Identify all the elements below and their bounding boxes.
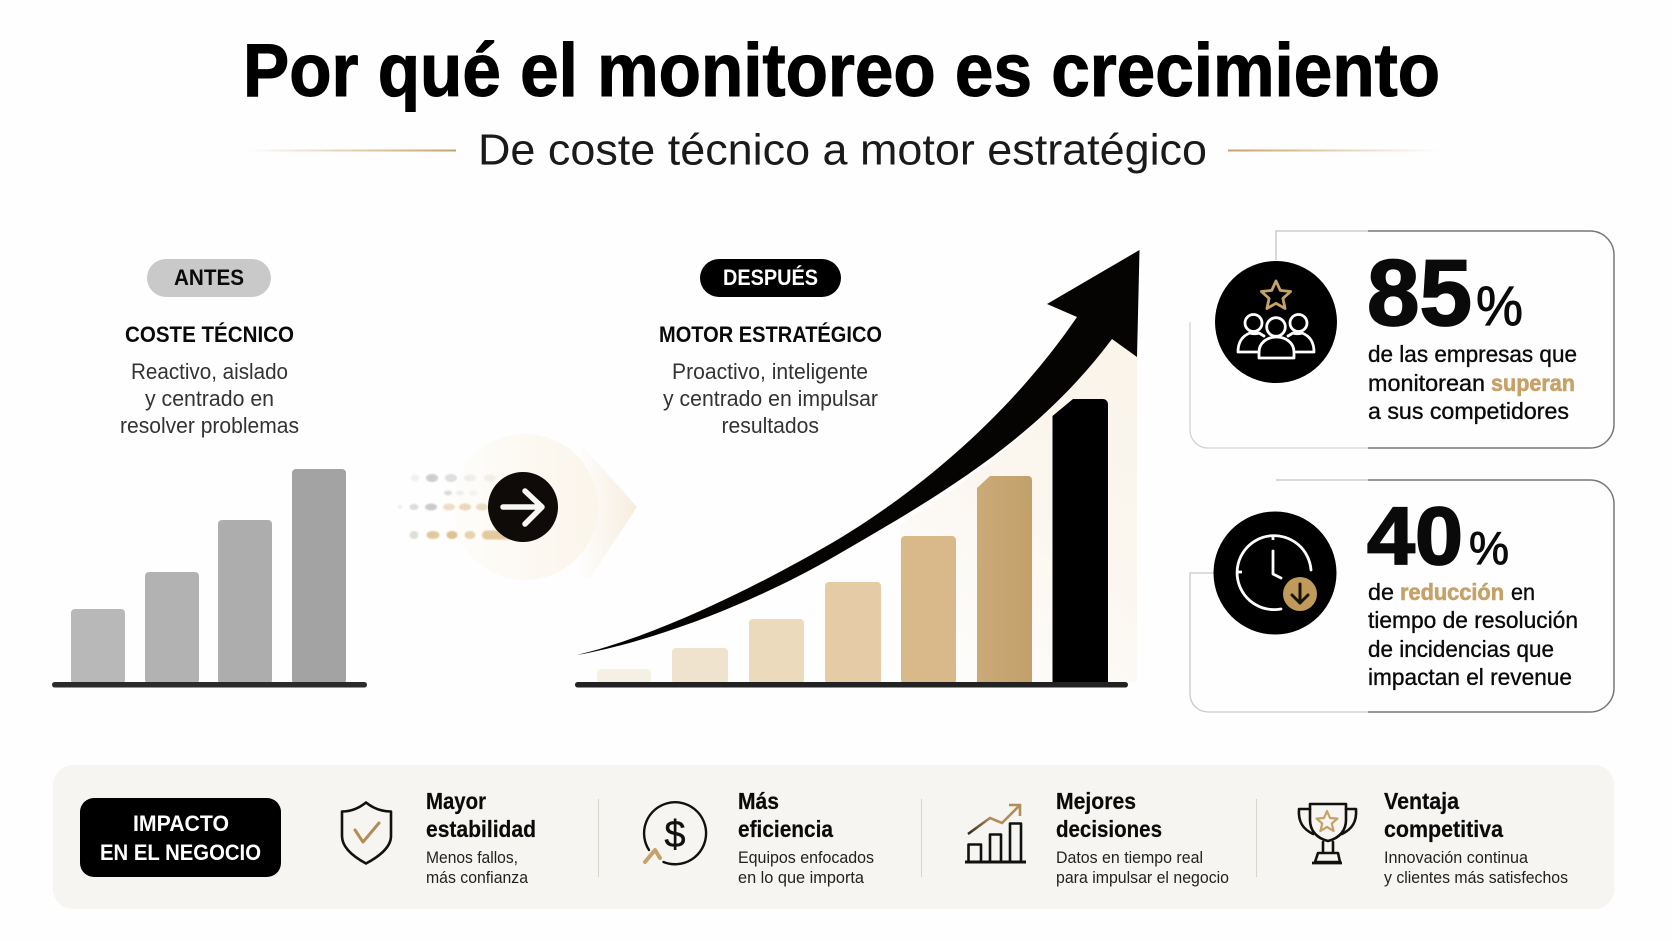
stat: 40% [1367, 491, 1509, 582]
title: Por qué el monitoreo es crecimiento [243, 28, 1440, 112]
item: más eficiencia: en lo que importa [738, 869, 865, 887]
panel: impacto en el negocio [53, 765, 1614, 909]
item: mayor estabilidad: estabilidad [426, 816, 536, 842]
text: 40% description: en [1511, 579, 1535, 605]
item: ventaja competitiva: Ventaja [1384, 788, 1459, 814]
item: mayor estabilidad: Mayor [426, 788, 486, 814]
item: más eficiencia: eficiencia [738, 816, 833, 842]
item: más eficiencia [644, 788, 874, 887]
bar chart: después with growth arrow [575, 250, 1140, 688]
badge: antes: ANTES [174, 265, 244, 290]
icon: rising chart [965, 805, 1026, 862]
stat: 85%: % [1476, 274, 1523, 337]
item: más eficiencia: Equipos enfocados [738, 849, 874, 867]
text: 40% description: reducción [1400, 579, 1504, 605]
item: mejores decisiones [965, 788, 1229, 887]
description: antes: resolver problemas [120, 413, 299, 438]
label: impacto en el negocio: IMPACTO [133, 811, 229, 836]
panel: después [575, 250, 1140, 688]
label: impacto en el negocio: EN EL NEGOCIO [100, 840, 261, 865]
icon: dollar coin: $ [664, 814, 686, 856]
description: después: y centrado en impulsar [663, 386, 878, 411]
text: 85% description [1368, 341, 1577, 424]
heading: motor estratégico: MOTOR ESTRATÉGICO [659, 322, 882, 347]
arrow: transition [398, 434, 637, 580]
item: mejores decisiones: Mejores [1056, 788, 1136, 814]
icon: team with star [1215, 261, 1337, 383]
badge: después: DESPUÉS [723, 265, 818, 290]
heading: coste técnico: COSTE TÉCNICO [125, 322, 294, 347]
item: ventaja competitiva: Innovación continua [1384, 849, 1529, 867]
icon: shield [342, 802, 391, 864]
icon: dollar coin [644, 802, 706, 864]
text: 40% description: tiempo de resolución [1368, 607, 1578, 633]
description: antes [120, 359, 299, 438]
panel: antes [52, 259, 367, 688]
item: mejores decisiones: para impulsar el negocio [1056, 869, 1229, 887]
stat: 85%: 85 [1367, 240, 1472, 345]
item: ventaja competitiva [1299, 788, 1568, 887]
description: después: Proactivo, inteligente [672, 359, 868, 384]
card: 40% [1190, 480, 1614, 712]
icon: clock with down arrow [1214, 512, 1336, 634]
bar chart: antes [52, 469, 367, 688]
badge: antes [147, 259, 271, 297]
item: más eficiencia: Más [738, 788, 779, 814]
subtitle with side rules: De coste técnico a motor estratégico [478, 126, 1207, 174]
stat: 85% [1367, 240, 1523, 345]
description: antes: Reactivo, aislado [131, 359, 288, 384]
icon: trophy [1299, 804, 1356, 863]
text: 85% description: a sus competidores [1368, 398, 1569, 424]
text: 40% description [1368, 579, 1578, 690]
badge: después [700, 259, 841, 297]
item: mejores decisiones: Datos en tiempo real [1056, 849, 1203, 867]
label: impacto en el negocio [80, 798, 281, 877]
text: 85% description: de las empresas que [1368, 341, 1577, 367]
stat: 40%: 40 [1367, 491, 1463, 582]
item: ventaja competitiva: competitiva [1384, 816, 1503, 842]
text: 85% description: superan [1491, 370, 1575, 396]
text: 40% description: de incidencias que [1368, 636, 1554, 662]
card: 85% [1190, 231, 1614, 448]
item: mayor estabilidad: Menos fallos, [426, 849, 518, 867]
description: después [663, 359, 878, 438]
item: mayor estabilidad: más confianza [426, 869, 529, 887]
description: antes: y centrado en [145, 386, 274, 411]
item: mejores decisiones: decisiones [1056, 816, 1162, 842]
text: 40% description: impactan el revenue [1368, 664, 1572, 690]
item: ventaja competitiva: y clientes más satisfechos [1384, 869, 1568, 887]
text: 85% description: monitorean [1368, 370, 1485, 396]
stat: 40%: % [1469, 522, 1509, 574]
text: 40% description: de [1368, 579, 1394, 605]
item: mayor estabilidad [342, 788, 536, 887]
description: después: resultados [722, 413, 819, 438]
